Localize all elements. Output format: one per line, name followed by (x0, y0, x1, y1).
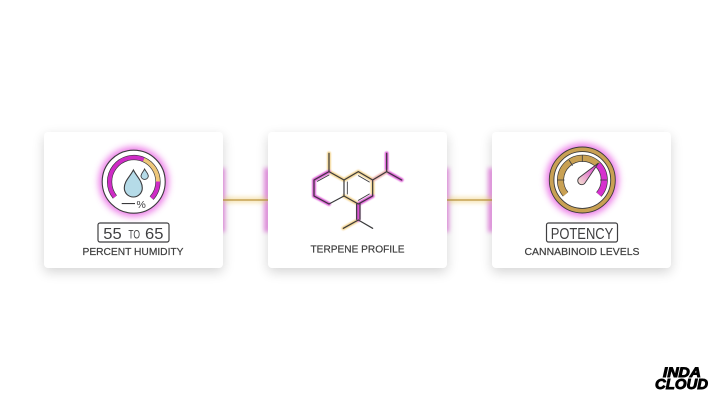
icon: humidity gauge (99, 147, 169, 217)
logo: inda cloud: INDA (663, 365, 701, 380)
icon: gauge needle (578, 163, 598, 185)
badge: 55 to 65 (98, 223, 169, 243)
badge: 55 to 65: 55 (103, 226, 122, 243)
panel: terpene profile (268, 132, 447, 272)
badge: 55 to 65: TO (128, 230, 140, 242)
connector: terpene to potency (443, 168, 494, 232)
logo: inda cloud: CLOUD (655, 377, 709, 393)
panel: percent humidity (44, 132, 223, 272)
icon: large water drop (124, 170, 142, 197)
connector: humidity to terpene (219, 168, 270, 232)
badge: potency: POTENCY (551, 226, 614, 243)
icon: potency gauge (546, 144, 619, 216)
icon: small water drop (141, 169, 148, 179)
label: cannabinoid levels: CANNABINOID LEVELS (524, 247, 640, 258)
icon: terpene molecule (314, 153, 402, 228)
panel: cannabinoid levels (492, 132, 671, 272)
label: percent humidity: PERCENT HUMIDITY (82, 247, 184, 258)
icon: humidity gauge: % (137, 199, 146, 211)
badge: 55 to 65: 65 (145, 226, 164, 243)
label: terpene profile: TERPENE PROFILE (310, 244, 405, 255)
logo: inda cloud (655, 365, 709, 393)
